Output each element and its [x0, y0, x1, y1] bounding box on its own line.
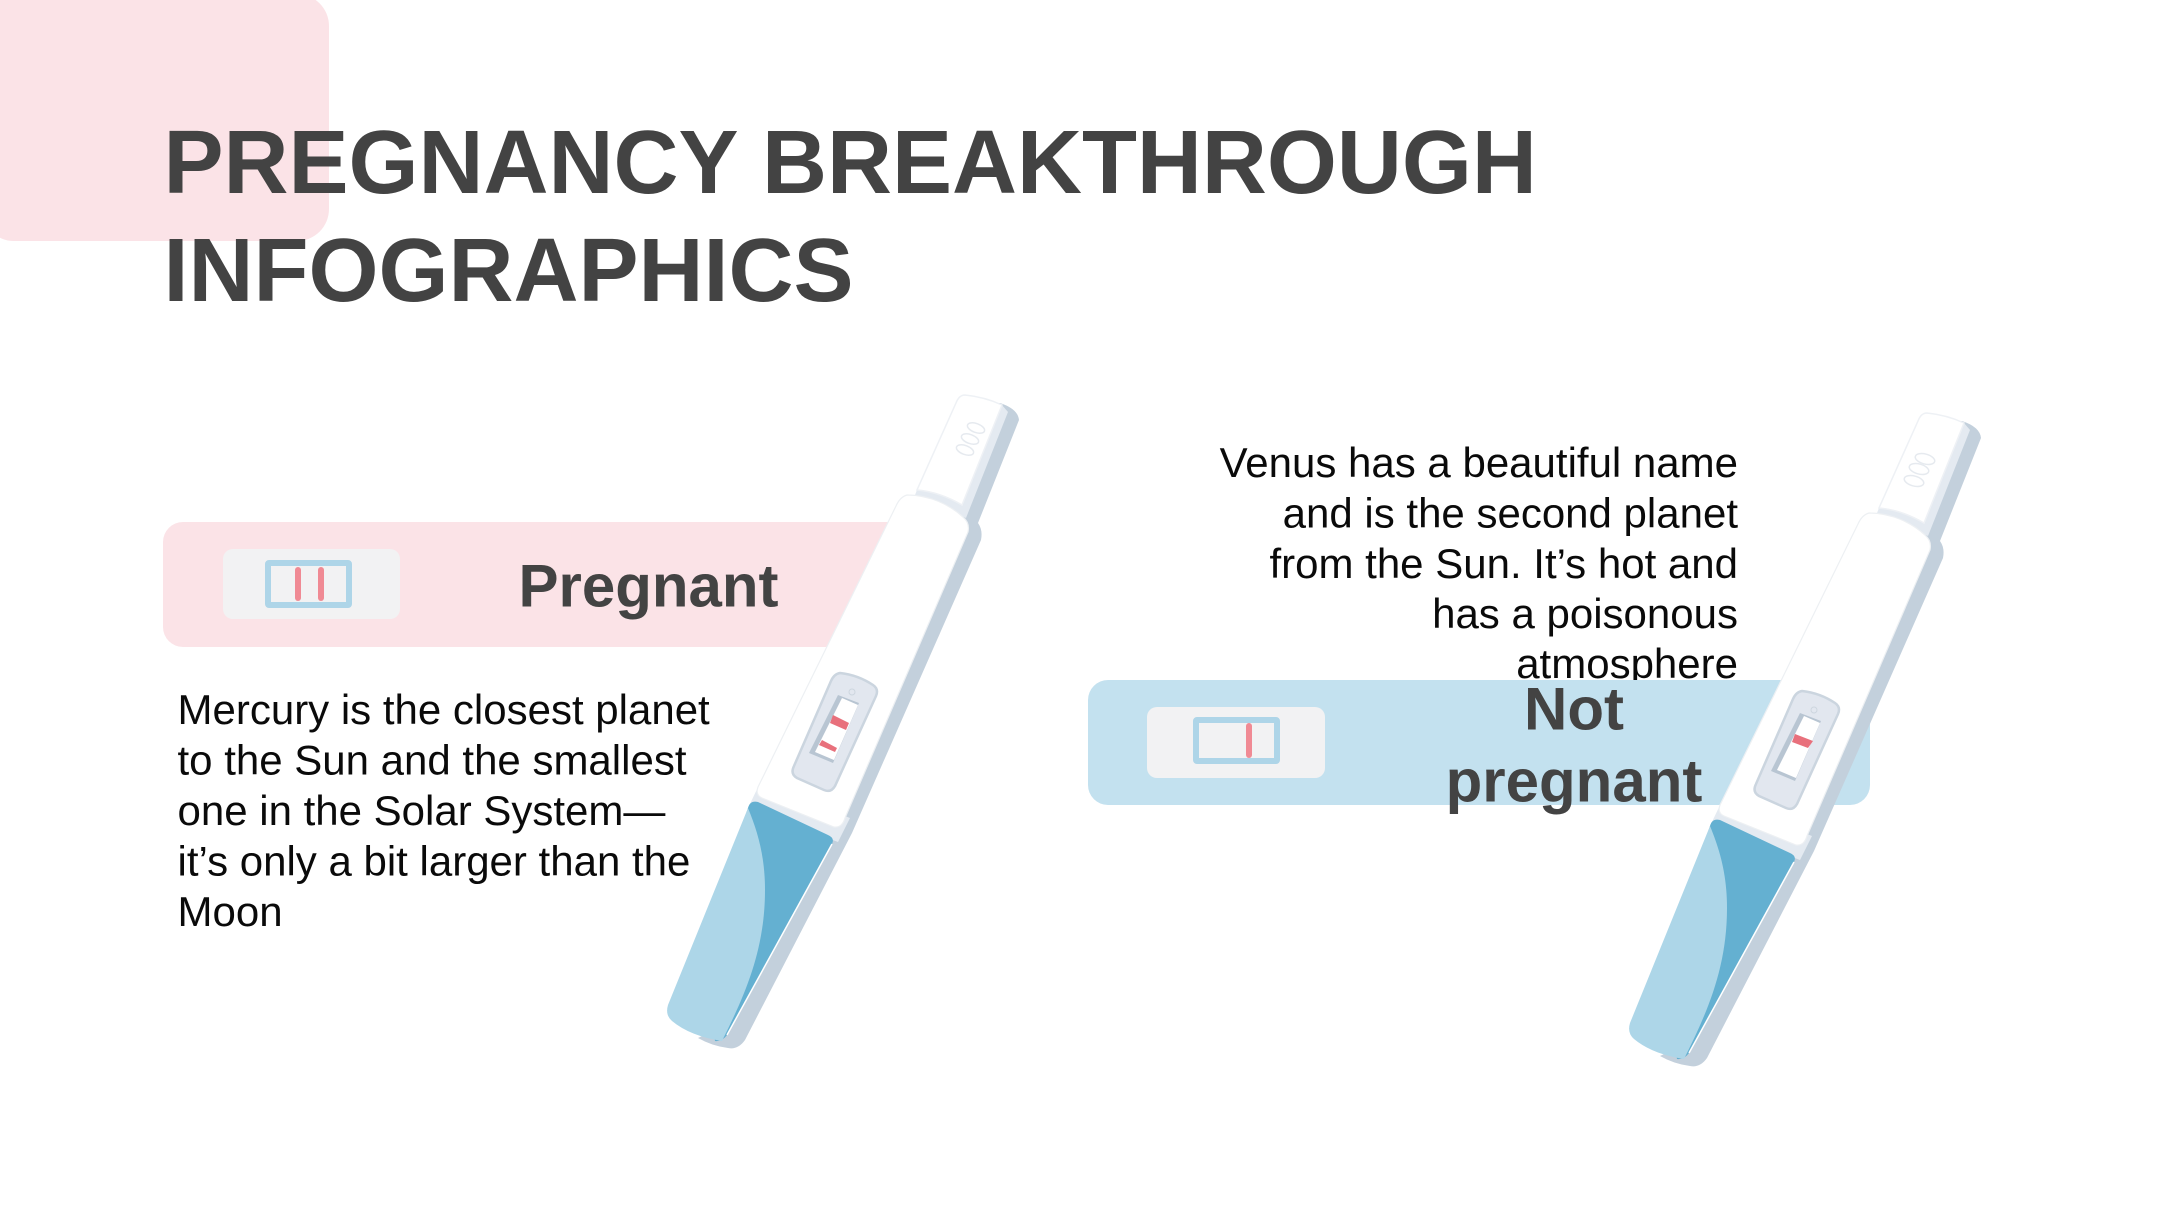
text block: Venus description	[1220, 439, 1738, 687]
text block: Mercury description: to the Sun and the smallest	[178, 736, 687, 784]
text block: Venus description: has a poisonous	[1432, 590, 1738, 637]
title: INFOGRAPHICS	[164, 221, 854, 321]
text block: Mercury description: it’s only a bit larger than the	[178, 838, 690, 884]
label: Pregnant: Pregnant	[518, 552, 779, 620]
text block: Venus description: Venus has a beautiful name	[1220, 439, 1738, 486]
text block: Venus description: atmosphere	[1516, 640, 1738, 687]
panel: pregnant label bar	[163, 522, 941, 647]
label: Not pregnant: Not	[1524, 676, 1624, 742]
icon: negative pregnancy test stick	[1629, 413, 1981, 1066]
decorative pink corner block	[0, 0, 329, 241]
title: PREGNANCY BREAKTHROUGH	[164, 113, 1537, 213]
icon: positive pregnancy test stick	[667, 395, 1019, 1048]
icon: negative test strip with one line	[1147, 707, 1325, 778]
label: Not pregnant	[1446, 676, 1702, 814]
title	[164, 113, 1537, 321]
text block: Venus description: and is the second planet	[1283, 490, 1738, 536]
text block: Mercury description: Moon	[178, 888, 283, 935]
icon: positive test strip with two lines	[223, 549, 400, 619]
text block: Venus description: from the Sun. It’s hot and	[1269, 540, 1738, 587]
text block: Mercury description: Mercury is the closest planet	[178, 686, 710, 733]
text block: Mercury description	[178, 686, 710, 935]
panel: not pregnant label bar	[1088, 676, 1870, 814]
label: Not pregnant: pregnant	[1446, 748, 1702, 814]
text block: Mercury description: one in the Solar System—	[178, 787, 665, 834]
